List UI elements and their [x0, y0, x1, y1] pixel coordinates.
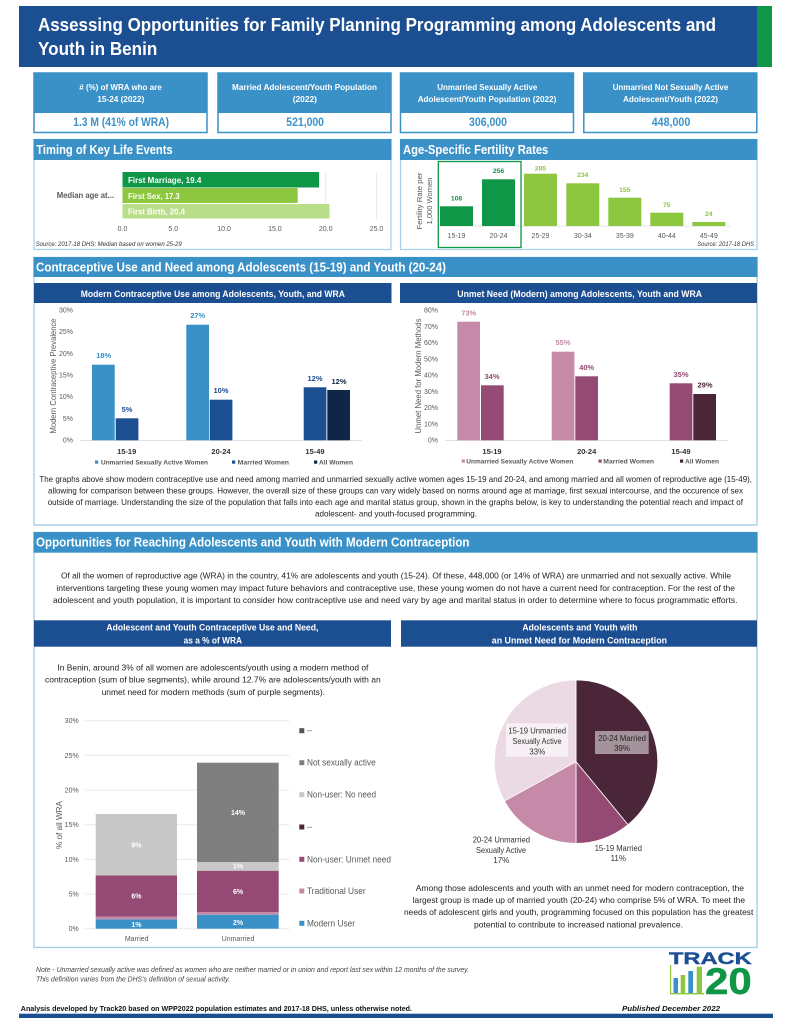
column chart: fertility rate by age: 234: [577, 172, 589, 179]
chart: modern contraceptive use: All Women: [319, 460, 353, 466]
source note: Source: 2017-18 DHS: [697, 242, 754, 248]
text block: explanation of graphs: allowing for comparison between these groups. However, the overall size of these groups can vary widely based on norms around age at marriage, first sexual intercourse, and the occurence of sex: [48, 486, 744, 496]
chart: unmet need for modern methods: 55%: [555, 338, 571, 347]
bar chart: median age at life events: 5.0: [168, 226, 178, 233]
legend: stacked chart: Not sexually active: [307, 758, 376, 768]
chart: unmet need for modern methods: 34%: [484, 372, 500, 381]
text block: pie chart summary: potential to contribute to increased national prevalence.: [474, 919, 683, 929]
text block: opportunities intro: adolescent and youth population, it is important to consider how contraceptive use and need vary by age and marital status in order to determine where to focus programmatic efforts.: [53, 595, 738, 605]
text block: stacked chart summary: In Benin, around 3% of all women are adolescents/youth using a modern method of: [57, 662, 369, 672]
column chart: fertility rate by age: 24: [705, 211, 713, 218]
footnote: definition of sexually active: This definition varies from the DHS's definition of sexual activity.: [36, 976, 230, 984]
bar chart: median age at life events: First Birth, 20.4: [128, 206, 185, 216]
chart: modern contraceptive use: 0%: [63, 438, 73, 445]
chart: modern contraceptive use: 5%: [63, 416, 73, 423]
chart: unmet need for modern methods: 20%: [424, 405, 438, 412]
stacked bar chart: percent of all WRA: 9%: [131, 842, 142, 850]
chart: unmet need for modern methods: 15-49: [671, 447, 691, 456]
text block: pie chart summary: largest group is made up of married youth (20-24) who comprise 5% of WRA. To meet the: [413, 895, 745, 905]
chart: modern contraceptive use: 27%: [190, 311, 206, 320]
logo: Track20: 20: [705, 961, 752, 1002]
chart: unmet need for modern methods: Unmarried Sexually Active Women: [466, 458, 573, 466]
panel: age-specific fertility rates: [400, 139, 757, 250]
text block: stacked chart summary: [45, 662, 381, 697]
stacked bar chart: percent of all WRA: 6%: [233, 889, 244, 896]
chart: modern contraceptive use: 10%: [59, 394, 73, 401]
bar chart: median age at life events: 20.0: [319, 226, 333, 233]
text block: opportunities intro: Of all the women of reproductive age (WRA) in the country, 41% are adolescents and youth (15-24). Of these, 448,000 (or 14% of WRA) are unmarried and not sexually active. While: [61, 570, 731, 580]
text block: pie chart summary: needs of adolescent girls and youth, programming focused on this population has the greatest: [404, 907, 754, 917]
pie chart: unmet need by group: Sexually Active: [476, 846, 527, 855]
section: use and need as percent of WRA: [34, 620, 391, 943]
chart: unmet need for modern methods: 10%: [424, 421, 438, 428]
chart: unmet need for modern methods: 50%: [424, 356, 438, 363]
chart: modern contraceptive use: 20%: [59, 351, 73, 358]
stat card: unmarried not sexually active: 448,000: [652, 115, 691, 129]
stacked bar chart: percent of all WRA: Married: [125, 936, 149, 943]
chart: modern contraceptive use: 12%: [307, 374, 323, 383]
section: unmet need breakdown: [401, 620, 757, 929]
title banner: [19, 6, 772, 67]
section: unmet need breakdown: an Unmet Need for Modern Contraception: [492, 636, 667, 646]
footnote: definition of sexually active: Note - Unmarried sexually active was defined as women who are neither married or in union and report last sex within 12 months of the survey.: [36, 967, 469, 974]
title banner: Youth in Benin: [38, 38, 157, 59]
chart: modern contraceptive use: 15-49: [305, 447, 325, 456]
chart: unmet need for modern methods: All Women: [685, 458, 719, 466]
pie chart: unmet need by group: [473, 680, 658, 865]
bar chart: median age at life events: 10.0: [217, 226, 231, 233]
stacked bar chart: percent of all WRA: 30%: [65, 718, 79, 725]
chart: unmet need for modern methods: 20-24: [577, 447, 597, 456]
attribution line: Analysis developed by Track20 based on WPP2022 population estimates and 2017-18 DHS, unless otherwise noted.: [21, 1004, 412, 1013]
column chart: fertility rate by age: 35-39: [616, 233, 634, 240]
column chart: fertility rate by age: 285: [535, 166, 546, 172]
chart: unmet need for modern methods: 30%: [424, 389, 438, 396]
logo: Track20: [669, 949, 753, 1002]
text block: stacked chart summary: unmet need for modern methods (sum of purple segments).: [102, 687, 325, 697]
pie chart: unmet need by group: 39%: [614, 744, 630, 753]
column chart: fertility rate by age: 75: [663, 202, 671, 209]
column chart: fertility rate by age: 155: [619, 187, 631, 194]
title banner: Assessing Opportunities for Family Planning Programming among Adolescents and: [38, 14, 716, 35]
legend: stacked chart: --: [307, 822, 312, 832]
stat card: married population: [218, 72, 392, 132]
chart: modern contraceptive use: [34, 283, 392, 466]
bar chart: median age at life events: 25.0: [370, 226, 383, 233]
chart: unmet need for modern methods: 29%: [697, 380, 713, 390]
stacked bar chart: percent of all WRA: 1%: [233, 864, 244, 870]
text block: explanation of graphs: outside of marriage. Understanding the size of the population that falls into each age and marital status group, shown in the graphs below, is key to understanding the potential reach and impact of: [48, 497, 744, 507]
legend: stacked chart: [299, 726, 391, 928]
column chart: fertility rate by age: 40-44: [658, 233, 676, 240]
pie chart: unmet need by group: 20-24 Married: [598, 734, 646, 743]
text block: stacked chart summary: contraception (sum of blue segments), while around 12.7% are adolescents/youth with an: [45, 674, 381, 684]
bar chart: median age at life events: Median age at...: [57, 191, 114, 200]
stat card: unmarried sexually active: Adolescent/Youth Population (2022): [418, 94, 556, 104]
stacked bar chart: percent of all WRA: 1%: [131, 922, 142, 929]
bar chart: median age at life events: 15.0: [268, 226, 282, 233]
column chart: fertility rate by age: 20-24: [490, 233, 508, 240]
text block: opportunities intro: interventions targeting these young women may impact future behaviors and contraceptive use, these young women do not have a current need for contraception. For the rest of the: [56, 583, 735, 593]
stat card: unmarried not sexually active: Unmarried Not Sexually Active: [613, 82, 729, 92]
column chart: fertility rate by age: Fertility Rate per: [415, 172, 424, 230]
stat card: unmarried not sexually active: Adolescent/Youth (2022): [623, 94, 718, 104]
pie chart: unmet need by group: 15-19 Married: [595, 844, 642, 853]
chart: modern contraceptive use: 5%: [122, 405, 133, 414]
column chart: fertility rate by age: 45-49: [700, 233, 718, 240]
stat card: married population: Married Adolescent/Youth Population: [232, 82, 377, 92]
text block: pie chart summary: [404, 883, 754, 929]
column chart: fertility rate by age: [415, 166, 730, 240]
chart: unmet need for modern methods: 0%: [428, 438, 438, 445]
panel: timing of key life events: [34, 139, 392, 250]
chart: modern contraceptive use: Unmarried Sexually Active Women: [101, 460, 208, 466]
stat card: unmarried sexually active: 306,000: [469, 115, 507, 129]
source note: Source: 2017-18 DHS; Median based on women 25-29: [36, 242, 182, 248]
stacked bar chart: percent of all WRA: 15%: [65, 822, 79, 829]
legend: stacked chart: Traditional User: [307, 886, 366, 896]
chart: unmet need for modern methods: Unmet Need (Modern) among Adolescents, Youth and WRA: [457, 289, 702, 300]
chart: unmet need for modern methods: 40%: [424, 373, 438, 380]
text block: opportunities intro: [53, 570, 738, 605]
heading: age-specific fertility rates: Age-Specific Fertility Rates: [403, 142, 548, 157]
chart: modern contraceptive use: Modern Contraceptive Prevalence: [49, 318, 58, 434]
stacked bar chart: percent of all WRA: % of all WRA: [55, 800, 64, 849]
chart: unmet need for modern methods: 73%: [461, 308, 477, 318]
chart: unmet need for modern methods: 40%: [579, 363, 595, 372]
stat card: WRA aged 15-24: 15-24 (2022): [97, 94, 144, 104]
stacked bar chart: percent of all WRA: Unmarried: [222, 936, 254, 943]
section: use and need as percent of WRA: Adolescent and Youth Contraceptive Use and Need,: [106, 622, 318, 632]
panel: contraceptive use and need: [34, 257, 758, 525]
bar chart: median age at life events: [57, 172, 383, 233]
stat card: married population: 521,000: [286, 115, 324, 129]
footer bar: [19, 1014, 773, 1018]
column chart: fertility rate by age: 30-34: [574, 233, 592, 240]
pie chart: unmet need by group: 17%: [493, 856, 509, 865]
publication date: Published December 2022: [622, 1004, 721, 1013]
chart: unmet need for modern methods: Married Women: [603, 458, 654, 466]
legend: stacked chart: Non-user: No need: [307, 790, 376, 800]
stacked bar chart: percent of all WRA: 5%: [69, 892, 79, 898]
section: use and need as percent of WRA: as a % of WRA: [184, 636, 242, 646]
legend: stacked chart: Non-user: Unmet need: [307, 854, 391, 864]
chart: modern contraceptive use: 18%: [96, 351, 112, 360]
stacked bar chart: percent of all WRA: 2%: [233, 920, 244, 927]
chart: unmet need for modern methods: 35%: [673, 370, 689, 379]
chart: modern contraceptive use: 10%: [213, 386, 229, 395]
column chart: fertility rate by age: 108: [451, 196, 462, 202]
stat card: WRA aged 15-24: [34, 72, 208, 132]
chart: unmet need for modern methods: Unmet Need for Modern Methods: [414, 318, 423, 434]
pie chart: unmet need by group: 33%: [529, 748, 545, 757]
text block: pie chart summary: Among those adolescents and youth with an unmet need for modern contraception, the: [416, 883, 744, 893]
bar chart: median age at life events: First Sex, 17.3: [128, 191, 180, 201]
chart: unmet need for modern methods: [400, 283, 757, 466]
stacked bar chart: percent of all WRA: 6%: [131, 894, 142, 900]
panel: opportunities for reaching adolescents and youth: [34, 532, 758, 948]
stacked bar chart: percent of all WRA: 10%: [65, 857, 79, 864]
stacked bar chart: percent of all WRA: 25%: [65, 753, 79, 760]
chart: modern contraceptive use: Modern Contraceptive Use among Adolescents, Youth, and WRA: [81, 289, 345, 300]
stacked bar chart: percent of all WRA: 20%: [65, 788, 79, 794]
chart: modern contraceptive use: 25%: [59, 329, 73, 336]
stat card: unmarried not sexually active: [583, 72, 757, 132]
stacked bar chart: percent of all WRA: 0%: [69, 926, 79, 933]
text block: explanation of graphs: The graphs above show modern contraceptive use and need among married and unmarried sexually active women ages 15-19 and 20-24, and among married and all women of reproductive age (15-49),: [39, 474, 752, 484]
chart: unmet need for modern methods: 80%: [424, 308, 438, 314]
chart: modern contraceptive use: 15%: [59, 373, 73, 380]
chart: modern contraceptive use: 20-24: [211, 447, 231, 456]
highlight box: ages 15-24: [438, 162, 521, 248]
logo: Track20: TRACK: [669, 949, 753, 968]
column chart: fertility rate by age: 15-19: [448, 233, 466, 240]
bar chart: median age at life events: First Marriage, 19.4: [128, 175, 202, 185]
chart: modern contraceptive use: 30%: [59, 308, 73, 314]
stacked bar chart: percent of all WRA: [55, 718, 391, 943]
column chart: fertility rate by age: 25-29: [532, 233, 550, 240]
footnote: definition of sexually active: [36, 967, 469, 984]
text block: explanation of graphs: adolescent- and youth-focused programming.: [315, 508, 477, 518]
heading: opportunities: Opportunities for Reaching Adolescents and Youth with Modern Contraception: [36, 534, 470, 550]
section: unmet need breakdown: Adolescents and Youth with: [522, 622, 637, 632]
pie chart: unmet need by group: 20-24 Unmarried: [473, 836, 530, 844]
stat card: unmarried sexually active: Unmarried Sexually Active: [437, 82, 538, 92]
column chart: fertility rate by age: 256: [493, 168, 504, 175]
chart: unmet need for modern methods: 60%: [424, 340, 438, 347]
chart: modern contraceptive use: 12%: [331, 377, 347, 386]
pie chart: unmet need by group: Sexually Active: [512, 737, 562, 746]
chart: unmet need for modern methods: 70%: [424, 324, 438, 331]
pie chart: unmet need by group: 15-19 Unmarried: [508, 726, 566, 736]
pie chart: unmet need by group: 11%: [611, 854, 626, 863]
heading: timing of key life events: Timing of Key Life Events: [36, 142, 173, 157]
bar chart: median age at life events: 0.0: [118, 226, 127, 233]
chart: modern contraceptive use: 15-19: [117, 447, 136, 456]
stat card: WRA aged 15-24: 1.3 M (41% of WRA): [73, 115, 169, 129]
chart: modern contraceptive use: Married Women: [238, 460, 289, 466]
heading: contraceptive use and need: Contraceptive Use and Need among Adolescents (15-19) and Youth (20-24): [36, 260, 446, 274]
stat card: married population: (2022): [293, 94, 317, 104]
legend: stacked chart: --: [307, 726, 312, 736]
stat card: unmarried sexually active: [400, 72, 574, 132]
column chart: fertility rate by age: 1,000 Women: [425, 178, 434, 224]
stacked bar chart: percent of all WRA: 14%: [231, 810, 246, 817]
legend: stacked chart: Modern User: [307, 918, 355, 928]
stat card: WRA aged 15-24: # (%) of WRA who are: [79, 82, 162, 92]
chart: unmet need for modern methods: 15-19: [482, 447, 502, 456]
text block: explanation of graphs: [39, 474, 752, 518]
